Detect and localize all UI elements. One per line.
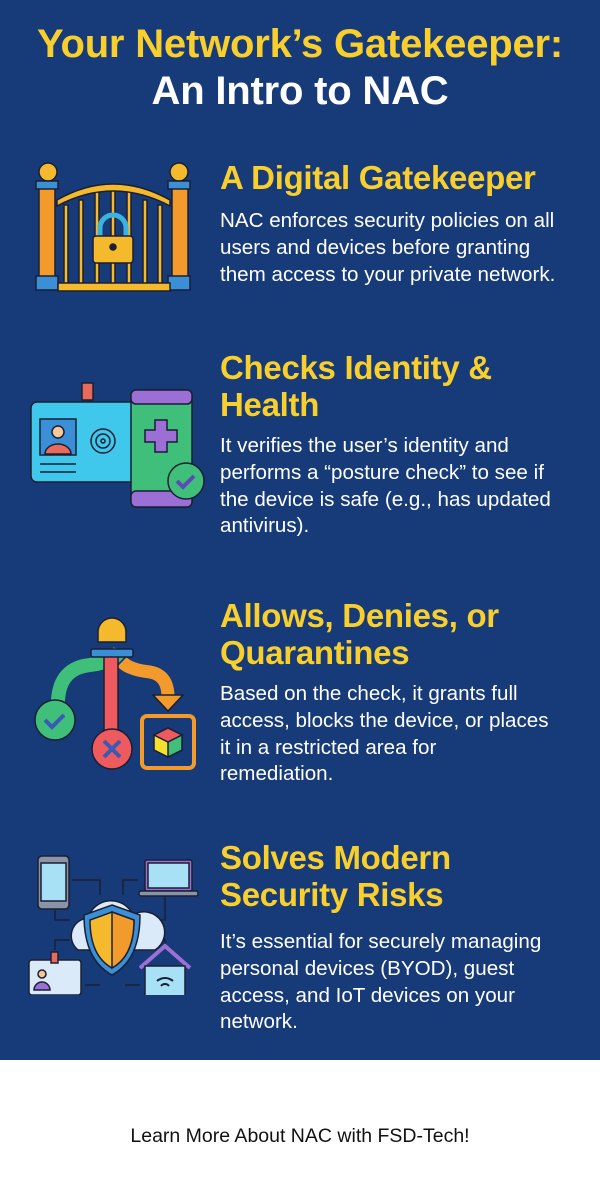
text 2: performs a “posture check” to see if (220, 461, 544, 484)
text 1: NAC enforces security policies on all (220, 209, 554, 232)
text 4 (220, 930, 541, 1033)
heading 2: Health (220, 386, 319, 423)
text 2: the device is safe (e.g., has updated (220, 488, 551, 511)
text 4: network. (220, 1010, 298, 1033)
heading 2 (220, 349, 492, 423)
icon: cloud shield network (28, 855, 199, 995)
text 3 (220, 682, 549, 785)
text 2: antivirus). (220, 514, 309, 537)
text 3: access, blocks the device, or places (220, 709, 549, 732)
text 2: It verifies the user’s identity and (220, 434, 509, 457)
text 1 (220, 209, 555, 286)
heading 4: Solves Modern (220, 839, 451, 876)
heading 4: Security Risks (220, 876, 443, 913)
heading 4 (220, 839, 451, 913)
icon: branching paths (34, 617, 196, 770)
text 4: access, and IoT devices on your (220, 984, 515, 1007)
footer text: Learn More About NAC with FSD-Tech! (130, 1125, 470, 1147)
text 3: remediation. (220, 762, 333, 785)
text 3: Based on the check, it grants full (220, 682, 518, 705)
title: Your Network’s Gatekeeper: (37, 22, 563, 66)
text 3: it in a restricted area for (220, 736, 436, 759)
text 1: them access to your private network. (220, 263, 555, 286)
heading 3: Quarantines (220, 634, 409, 671)
text 2 (220, 434, 551, 537)
text 4: It’s essential for securely managing (220, 930, 541, 953)
subtitle: An Intro to NAC (152, 69, 448, 113)
text 1: users and devices before granting (220, 236, 530, 259)
heading 3: Allows, Denies, or (220, 597, 499, 634)
heading 3 (220, 597, 499, 671)
heading 1: A Digital Gatekeeper (220, 159, 536, 196)
heading 2: Checks Identity & (220, 349, 492, 386)
icon: gate with lock (35, 162, 191, 292)
text 4: personal devices (BYOD), guest (220, 957, 514, 980)
icon: ID card and phone (30, 382, 205, 508)
